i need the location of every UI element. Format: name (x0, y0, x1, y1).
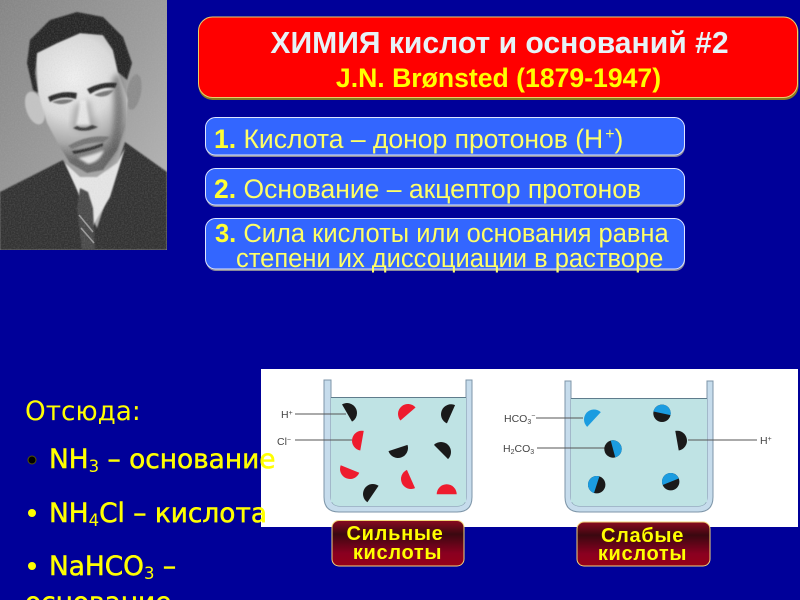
definition box 3: степени их диссоциации в растворе (236, 245, 663, 273)
weak acid beaker (503, 381, 772, 512)
item NH4Cl: Cl – кислота (99, 498, 267, 529)
button: weak acids: Слабые (601, 525, 684, 547)
subtitle text: J.N. Brønsted (1879-1947) (336, 63, 661, 93)
definition box 1 (206, 118, 685, 157)
item NH3: NH (49, 444, 89, 475)
label H+: H (760, 435, 768, 447)
label H2CO3: CO (514, 443, 530, 455)
strong acid beaker (277, 380, 472, 512)
label HCO3-: 3 (527, 419, 531, 426)
item NaHCO3: – (154, 551, 176, 582)
item NaHCO3: NaHCO (49, 551, 144, 582)
white diagram panel (261, 369, 798, 527)
item NH3 (28, 444, 276, 476)
button: strong acids (332, 520, 464, 566)
button: weak acids: кислоты (598, 543, 687, 565)
label H+: + (768, 436, 772, 443)
label Cl-: Cl (277, 436, 287, 448)
label H2CO3: 3 (530, 449, 534, 456)
definition box 1: ) (615, 124, 623, 154)
definition box 2 (206, 168, 685, 207)
item NH3: – основание (99, 444, 276, 475)
definition box 3 (206, 218, 685, 273)
definition box 2: 2. Основание – акцептор протонов (214, 174, 641, 204)
label H2CO3: 2 (511, 449, 515, 456)
label HCO3-: HCO (504, 413, 527, 425)
title text: ХИМИЯ кислот и оснований #2 (270, 27, 729, 60)
molecules (580, 403, 689, 493)
button: weak acids (577, 522, 710, 566)
label H+: H (281, 409, 289, 421)
ions (337, 399, 457, 502)
item NH4Cl: 4 (89, 511, 99, 530)
definition box 1: + (605, 126, 615, 143)
label H+: + (289, 410, 293, 417)
item NH3: 3 (89, 457, 99, 476)
heading: from here: Отсюда: (25, 397, 141, 427)
label HCO3-: − (531, 413, 535, 420)
definition box 1: 1. Кислота – донор протонов (Н (214, 124, 603, 154)
item NH4Cl (28, 498, 267, 530)
portrait photo of J.N. Brønsted (0, 0, 167, 250)
item NaHCO3 (25, 551, 176, 600)
label H2CO3: H (503, 443, 511, 455)
item NaHCO3: 3 (144, 564, 154, 583)
definition box 3: 3. Сила кислоты или основания равна (215, 220, 670, 248)
conclusions list (25, 397, 276, 600)
item NH4Cl: NH (49, 498, 89, 529)
label Cl-: − (287, 437, 291, 444)
button: strong acids: кислоты (353, 542, 442, 564)
button: strong acids: Сильные (347, 523, 443, 545)
title banner (198, 17, 798, 100)
